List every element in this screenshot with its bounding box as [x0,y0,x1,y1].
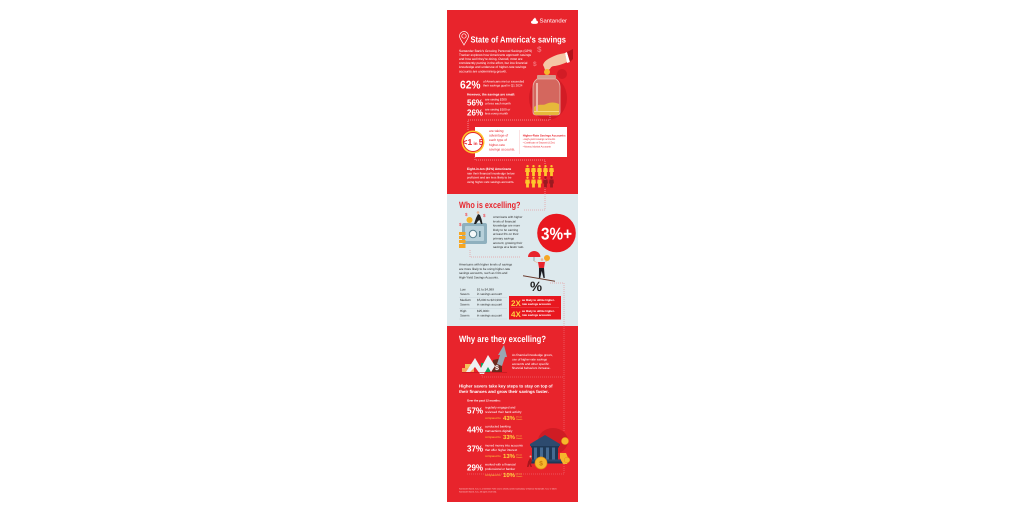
stat: 26 percent: 26% [467,107,483,117]
stat: 44 percent: 33% [503,434,516,441]
stat: 37 percent [467,443,523,460]
illustration: rising chart with money: $ [495,364,499,372]
intro paragraph: and how well they're doing. Overall, most are [459,57,523,61]
badge: 3 percent plus: 3%+ [541,224,572,244]
text: higher savers paragraph: are more likely to be using higher-rate [459,267,510,271]
icon: dollar signs: $ [533,61,537,68]
stat: 37 percent: compared to [485,454,501,458]
callout: one in five higher-rate accounts: • Money Market Accounts [523,145,552,148]
stat: 37 percent: 13% [503,453,516,460]
panel: who is excelling background [447,194,578,326]
text: eight in ten: proficient and are less likely to be [467,176,512,180]
stat: 29 percent: professional or banker [485,467,515,471]
icon: dollar signs: $ [537,45,542,54]
icon: people grid, eight of ten highlighted [525,165,554,188]
table: saver tiers: Medium [460,298,471,302]
table: saver tiers: Savers [460,314,470,318]
text: higher levels of knowledge [493,215,524,249]
callout: 2X and 4X as likely: rate savings accounts [522,303,551,306]
stat: 29 percent: worked with a financial [485,463,516,467]
footer: legal text: Santander Bank, N.A. is a Member FDIC and a wholly owned subsidiary of Banco Santander, S.A. © 2024 [459,488,557,490]
illustration: bank building with coins [527,428,570,469]
stat: 26 percent [467,107,510,117]
text: higher levels of knowledge: likely to be earning [493,228,518,232]
stat: 44 percent: 44% [467,424,483,434]
illustration: rising chart with money [462,345,507,374]
stat: 44 percent: of Low [516,434,522,438]
stat: 62 percent: of Americans met or exceeded [483,79,524,83]
table: saver tiers: Savers [460,302,470,306]
connector lines, lower [467,326,564,474]
table: saver tiers: in savings account [477,292,502,296]
footer: legal text [459,488,557,494]
stat: 44 percent: transactions digitally [485,429,513,433]
title: State of America's savings [470,34,566,44]
text: higher savers paragraph: Americans with higher levels of savings [459,262,513,266]
footer: legal text: Santander Bank, N.A. All rights reserved. [459,490,497,494]
logo: Santander [531,18,567,24]
text: eight in ten: Eight-in-ten (81%) Americans [467,167,511,171]
text: eight in ten: using higher-rate savings accounts. [467,180,514,184]
callout: one in five higher-rate accounts: are taking [489,129,504,133]
callout: 2X and 4X as likely: 4X [511,310,521,319]
table: saver tiers [459,288,507,319]
panel: why are they excelling background [447,326,578,502]
intro paragraph: Santander Bank's Growing Personal Savings (GPS) [459,49,532,53]
callout: one in five higher-rate accounts: savings accounts. [489,147,515,151]
subheading: past 12 months: Over the past 12 months: [467,398,501,402]
illustration: safe with coins and climbing figure: $ [459,222,462,227]
stat: 57 percent: 57% [467,405,483,415]
subheading: savings are small: However, the savings are small: [467,92,515,96]
stat: 26 percent: are saving $100 or [485,108,510,112]
stat: 44 percent: conducted banking [485,425,511,429]
stat: 57 percent: compared to [485,416,501,420]
callout: one in five higher-rate accounts: higher-rate [489,143,505,147]
callout: 2X and 4X as likely: 2X [511,299,521,308]
stat: 44 percent: compared to [485,435,501,439]
text: as financial knowledge grows [512,353,553,370]
stat: 56 percent: are saving $300 [485,98,507,102]
intro paragraph: consistently putting in the effort, but low financial [459,61,528,65]
connector lines, upper [468,115,550,194]
table: saver tiers: in savings account [477,302,502,306]
stat: 37 percent: Savers [516,456,522,459]
stat: 37 percent: of Low [516,454,522,456]
stat: 57 percent: of Low [516,416,522,418]
stat: 57 percent: Savers [516,418,522,421]
text: higher levels of knowledge: account, growing their [493,241,522,245]
stat: 37 percent: 37% [467,443,483,453]
illustration: bank building with coins: $ [539,460,543,468]
callout: one in five higher-rate accounts: advantage of [489,134,508,138]
table: saver tiers: High [460,309,467,313]
stat: 29 percent: of Low [516,472,522,476]
stat: 62 percent: 62% [460,79,481,91]
stat: 56 percent: or less each month [485,102,511,106]
badge: 3 percent plus [537,214,576,252]
stat: 57 percent: regularly engaged and [485,406,516,410]
table: saver tiers: $5,000 to $24,999 [477,298,502,302]
stat: 37 percent: moved money into accounts [485,444,523,448]
illustration: person balancing on percent sign with umbrella: % [530,279,542,294]
intro paragraph: accounts are undermining growth. [459,69,507,73]
text: as financial knowledge grows: As financial knowledge grows, [512,353,553,357]
stat: 26 percent: less every month [485,112,508,116]
text: higher levels of knowledge: at least 3% on their [493,232,519,236]
stat: 56 percent: 56% [467,97,483,107]
intro paragraph: knowledge and underuse of higher-rate savings [459,65,527,69]
table: saver tiers: Low [460,288,466,292]
text: eight in ten: rate their financial knowledge below [467,171,515,175]
text: higher levels of knowledge: knowledge are more [493,224,521,228]
heading: higher savers: their finances and grow their savings faster. [459,389,549,394]
stat: 62 percent: their savings goal in Q1 2024 [483,84,523,88]
callout: one in five higher-rate accounts [462,127,567,157]
icon: dollar signs [533,45,542,68]
stat: 29 percent [467,462,522,479]
heading: higher savers: Higher savers take key steps to stay on top of [459,384,553,388]
callout: one in five higher-rate accounts: • High-yield savings accounts [523,138,556,141]
text: higher levels of knowledge: levels of financial [493,219,516,223]
illustration: safe with coins and climbing figure: $ [483,213,486,218]
callout: one in five higher-rate accounts: <1 in 5 [463,137,484,147]
callout: 2X and 4X as likely [509,296,561,320]
logo: Santander: Santander [540,18,567,24]
text: higher savers paragraph: savings accounts, such as CDs and [459,271,508,275]
icon: location pin [460,32,468,45]
stat: 29 percent: compared to [485,473,501,477]
callout: one in five higher-rate accounts: Higher-Rate Savings Accounts: [523,133,566,137]
text: as financial knowledge grows: financial behaviors increase. [512,366,551,370]
heading: higher savers [459,384,553,394]
heading: why are they excelling: Why are they excelling? [459,334,546,344]
stat: 62 percent [460,79,524,91]
stat: 57 percent: 43% [503,415,516,422]
stat: 29 percent: 29% [467,462,483,472]
panel: state of savings background [447,10,578,194]
text: higher levels of knowledge: primary savings [493,236,515,240]
stat: 37 percent: that offer higher interest [485,448,517,452]
text: eight in ten [467,167,515,184]
connector lines, middle [470,194,564,326]
illustration: safe with coins and climbing figure: $ [465,212,468,217]
stat: 56 percent [467,97,511,107]
text: as financial knowledge grows: accounts and other specific [512,362,549,366]
stat: 44 percent [467,424,522,441]
intro paragraph [459,49,532,73]
illustration: safe with coins and climbing figure [459,211,487,248]
heading: who is excelling: Who is excelling? [459,200,520,210]
intro paragraph: Tracker explores how Americans approach savings [459,53,531,57]
text: as financial knowledge grows: use of higher-rate savings [512,358,548,362]
illustration: hand dropping coin in jar [529,49,573,120]
table: saver tiers: in savings account [477,314,502,318]
stat: 44 percent: Savers [516,437,522,440]
table: saver tiers: $1 to $4,999 [477,288,494,292]
table: saver tiers: $25,000+ [477,309,490,313]
text: higher levels of knowledge: Americans with higher [493,215,523,219]
callout: one in five higher-rate accounts: • Certificate of Deposit (CDs) [523,142,555,145]
callout: 2X and 4X as likely: as likely to utilize higher- [522,310,555,313]
table: saver tiers: Savers [460,292,470,296]
stat: 57 percent [467,405,522,422]
text: higher savers paragraph [459,262,513,279]
text: higher levels of knowledge: savings at a faster rate. [493,245,524,249]
stat: 57 percent: reviewed their bank activity [485,410,522,414]
illustration: person balancing on percent sign with umbrella [523,251,555,294]
callout: one in five higher-rate accounts: each type of [489,138,507,142]
text: higher savers paragraph: High-Yield Savings Accounts. [459,275,499,279]
stat: 29 percent: 10% [503,472,516,479]
callout: 2X and 4X as likely: as likely to utilize higher- [522,299,555,302]
callout: 2X and 4X as likely: rate savings accounts [522,314,551,317]
stat: 29 percent: Savers [516,475,522,478]
